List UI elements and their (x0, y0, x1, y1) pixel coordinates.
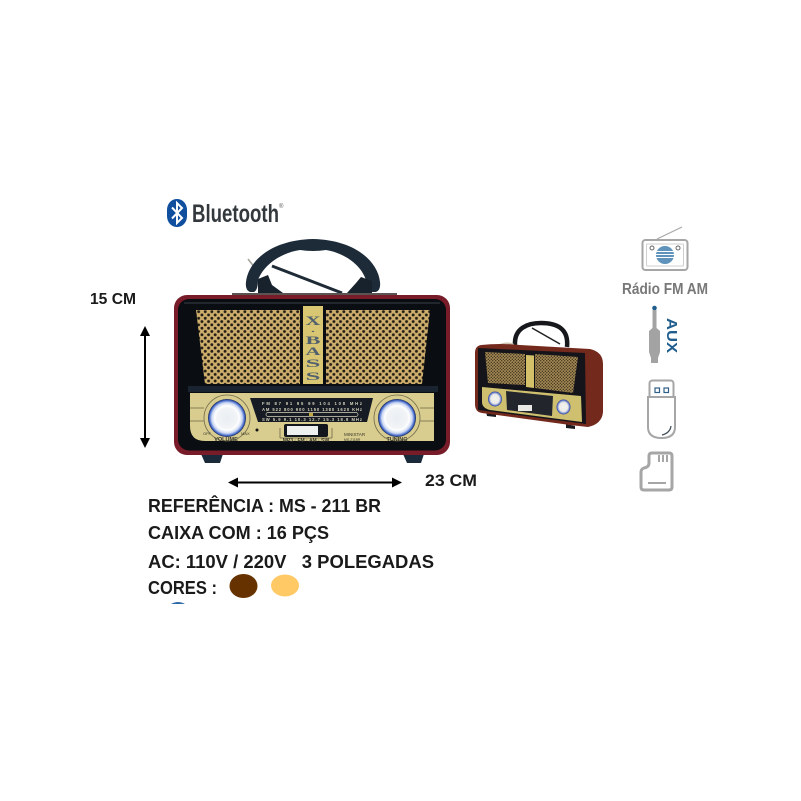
panel labels: TUNING (386, 437, 408, 443)
voltage line: AC: 110V / 220V 3 POLEGADAS (148, 551, 434, 572)
icon: AUX jack: AUX (663, 318, 680, 353)
X-BASS badge: B (306, 333, 320, 347)
box quantity line: CAIXA COM : 16 PÇS (148, 522, 329, 543)
icon: bluetooth logo: Bluetooth (192, 200, 279, 228)
X-BASS badge (303, 306, 323, 384)
speaker grille left (196, 310, 300, 384)
panel labels (203, 431, 408, 444)
tuning display: AM 522 800 900 1150 1380 1620 KHz (262, 407, 362, 412)
radio cabinet (174, 295, 450, 455)
X-BASS badge: S (306, 356, 321, 370)
arrow: width (228, 478, 402, 488)
speaker grille right (326, 310, 430, 384)
small radio panel (482, 387, 582, 422)
radio feet (201, 454, 424, 463)
specification text (148, 495, 434, 598)
arrow: height (140, 326, 150, 448)
panel labels: MS-211BR (344, 438, 361, 442)
small radio knobs (488, 392, 502, 406)
X-BASS badge: A (306, 344, 321, 358)
small radio badge (526, 355, 534, 388)
tuning display: FM 87 91 95 99 104 108 MHz (262, 401, 362, 406)
icon: micro SD card (641, 453, 672, 490)
X-BASS badge: X (306, 313, 321, 328)
label: width: 23 CM (425, 472, 477, 490)
colours label: CORES : (148, 577, 217, 598)
panel labels: VOLUME (214, 437, 238, 443)
main radio product image (174, 239, 450, 463)
label: Rádio FM AM: Rádio FM AM (622, 281, 708, 298)
panel labels: MINISTAR (344, 432, 366, 437)
clipped blue swatch (171, 602, 185, 604)
panel labels: MAX (241, 431, 250, 436)
panel labels: OFF (203, 431, 212, 436)
X-BASS badge: - (312, 326, 314, 336)
colour swatch: brown (230, 574, 258, 598)
small radio cabinet (475, 344, 603, 427)
X-BASS badge: S (306, 369, 321, 383)
small radio handle (500, 323, 567, 347)
icon: USB drive (648, 380, 675, 438)
panel labels: MP3 · FM · AM · SW (283, 438, 330, 444)
small radio display (506, 391, 553, 416)
reference line: REFERÊNCIA : MS - 211 BR (148, 495, 381, 516)
control panel (190, 393, 434, 444)
tuning display: SW 5.9 9.1 10.3 12.7 15.3 18.8 MHz (262, 417, 362, 422)
icon: bluetooth logo (167, 199, 284, 228)
band switch (284, 424, 328, 437)
tuning display (250, 398, 373, 422)
small radio angled view (475, 323, 603, 429)
small radio front (478, 348, 586, 424)
icon: AUX jack (649, 306, 680, 363)
volume knob (208, 399, 246, 437)
label: height: 15 CM (90, 291, 136, 308)
radio handle and antenna (232, 239, 397, 295)
icon: radio FM AM (642, 227, 688, 270)
icon: bluetooth logo: ® (279, 203, 284, 210)
tuning knob (378, 399, 416, 437)
small radio grilles (485, 352, 525, 385)
small radio feet (486, 411, 575, 429)
colour swatch: light orange (271, 574, 299, 596)
